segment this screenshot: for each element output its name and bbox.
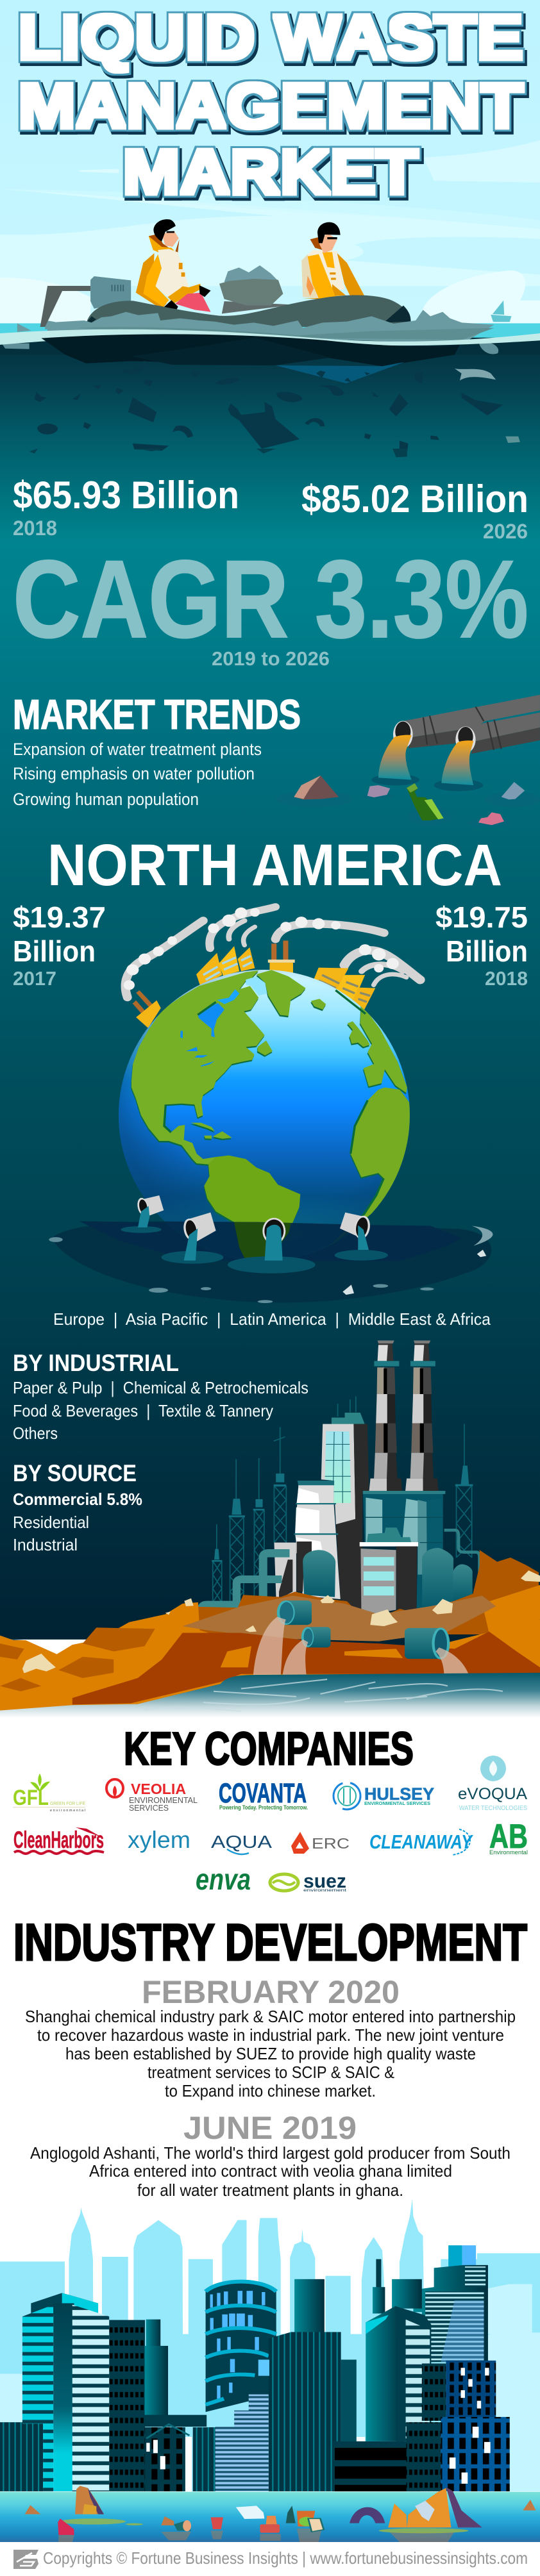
fish (455, 369, 496, 381)
water surface (0, 320, 540, 355)
market trends heading: MARKET TRENDS (13, 691, 301, 738)
sky clouds (0, 140, 540, 325)
market trends list (13, 740, 262, 809)
pale right buildings (0, 2284, 540, 2491)
underwater boat shadow (41, 334, 460, 383)
building: small window block and bridge (145, 2415, 215, 2491)
building: left dark block (0, 2422, 43, 2491)
building: chimney block (145, 2320, 168, 2416)
logo: Covanta: COVANTA (219, 1778, 307, 1809)
industrial plant (192, 1340, 539, 1634)
spray can (260, 2516, 280, 2533)
building: blue towers (407, 2361, 510, 2491)
logo: Veolia: ENVIRONMENTAL (129, 1795, 198, 1805)
outboard motor (40, 276, 131, 327)
inflatable boat hull (47, 295, 494, 344)
logo: Suez: environnement (303, 1889, 347, 1893)
logo: Hulsey: HULSEY (364, 1784, 434, 1804)
development: June 2019: JUNE 2019 (183, 2110, 357, 2146)
metal cup (502, 782, 525, 799)
white cooling tower (274, 1481, 341, 1604)
stat: 2017 value: 2017 (13, 967, 56, 990)
stat: 2018 value: $65.93 Billion (13, 474, 239, 517)
tall rock (75, 2486, 104, 2514)
building: low black block (332, 2441, 420, 2491)
puddle details (49, 1226, 493, 1303)
globe backdrop: puddle, smoke and factories (52, 907, 491, 1302)
glass tower (321, 1413, 369, 1615)
upper ground (192, 1550, 539, 1634)
stat: 2017 value: $19.37 (13, 901, 106, 934)
waste splashes (121, 1226, 388, 1274)
by source block: Industrial (13, 1535, 78, 1554)
by industrial block (13, 1350, 308, 1443)
stat: 2018 value (13, 474, 239, 540)
logo: Suez (270, 1870, 347, 1893)
dark coast edges (164, 990, 384, 1250)
footer logo (13, 2550, 38, 2569)
bottle (286, 2505, 296, 2523)
stat: 2026 value: $85.02 Billion (301, 478, 528, 520)
logo: Xylem: xylem (128, 1827, 190, 1853)
office block (360, 1542, 418, 1616)
logo: Veolia: SERVICES (129, 1803, 169, 1813)
market trends list: Expansion of water treatment plants (13, 740, 262, 759)
person: left worker (136, 219, 211, 312)
continents (131, 970, 410, 1259)
by industrial block: Paper & Pulp | Chemical & Petrochemicals (13, 1378, 308, 1397)
person: right worker (301, 222, 373, 328)
logo: GFL: environmental (50, 1809, 85, 1813)
ocean sphere (119, 970, 410, 1261)
lattice towers (213, 1396, 472, 1634)
building: twin spires (366, 2259, 431, 2441)
pipes and polluted outflow (276, 695, 540, 827)
development: February 2020: to recover hazardous waste in industrial park. The new joint venture (37, 2025, 504, 2045)
dark puddle (52, 1221, 491, 1302)
factory: top left group (196, 946, 255, 986)
earth globe (109, 970, 423, 1276)
left bucket (136, 1195, 164, 1227)
stat: 2018 regional value: Billion (446, 935, 528, 968)
logo: Evoqua: WATER TECHNOLOGIES (459, 1805, 527, 1812)
south america submerged (234, 1222, 291, 1259)
development: June 2019 (30, 2110, 510, 2200)
logo: GFL: GFL (13, 1786, 49, 1810)
teal process building (363, 1491, 445, 1609)
logo: Enva: enva (196, 1863, 251, 1896)
factory: left (133, 990, 161, 1028)
other regions: Europe | Asia Pacific | Latin America | Middle East & Africa (53, 1309, 491, 1329)
by industrial block: Others (13, 1424, 58, 1443)
logo: Covanta: Powering Today. Protecting Tomorrow. (219, 1804, 308, 1811)
stat: 2017 value (13, 901, 106, 990)
red jug (58, 2518, 74, 2535)
logo: Evoqua (458, 1756, 527, 1812)
development: February 2020: to Expand into chinese market. (165, 2081, 376, 2100)
white container (236, 2505, 264, 2519)
tyre (350, 2507, 385, 2523)
ripple (472, 1226, 493, 1246)
polluted ground and water (0, 1570, 540, 1718)
logo: Hulsey (333, 1782, 434, 1809)
floating rubbish (35, 361, 503, 451)
large rock pile (388, 2487, 482, 2527)
green bottle (407, 783, 444, 820)
logo: AB Environmental: AB (489, 1818, 528, 1856)
development: February 2020: Shanghai chemical industry park & SAIC motor entered into partnership (25, 2007, 516, 2026)
small rocks (25, 2500, 536, 2525)
stat: 2026 value: 2026 (483, 520, 528, 543)
water shadow on globe (165, 1222, 350, 1259)
development: February 2020: FEBRUARY 2020 (142, 1974, 400, 2010)
development: June 2019: Africa entered into contract with veolia ghana limited (89, 2161, 452, 2181)
boat scene (40, 219, 494, 344)
building: stepped striped block (215, 2395, 269, 2491)
orange ground (0, 1602, 540, 1713)
contaminated pool (0, 1673, 540, 1718)
navy shadow band (80, 1221, 462, 1261)
development: June 2019: Anglogold Ashanti, The world's third largest gold producer from South (30, 2143, 510, 2163)
by industrial block: BY INDUSTRIAL (13, 1350, 179, 1376)
trash bag (219, 265, 288, 313)
algae patches (60, 2518, 468, 2533)
background: sea gradient (0, 333, 540, 1718)
logo: Veolia (106, 1779, 198, 1813)
pink rock (478, 812, 504, 825)
back pipe (393, 695, 540, 748)
development: June 2019: for all water treatment plants in ghana. (137, 2181, 403, 2200)
green can (174, 2520, 191, 2531)
stat: 2026 value (301, 478, 528, 543)
by source block: Residential (13, 1513, 89, 1532)
stat: 2018 regional value (435, 901, 528, 990)
river water (0, 2492, 540, 2542)
logo: ERC (291, 1832, 350, 1854)
polluted river (0, 2486, 540, 2542)
logo: ERC: ERC (312, 1835, 350, 1852)
cylindrical tower (206, 2282, 276, 2412)
development: February 2020: has been established by SUEZ to provide high quality waste (65, 2044, 476, 2063)
by industrial block: Food & Beverages | Textile & Tannery (13, 1401, 273, 1420)
by source block: Commercial 5.8% (13, 1490, 142, 1509)
purple rock (367, 785, 390, 797)
by source block: BY SOURCE (13, 1460, 137, 1486)
distant boat (491, 301, 511, 322)
centre bucket (262, 1218, 285, 1261)
stat: 2018 value: 2018 (13, 517, 57, 540)
logo: Clean Harbors (13, 1827, 104, 1854)
background: sky (0, 0, 540, 340)
river reflections (58, 2529, 455, 2542)
logo: Evoqua: eVOQUA (458, 1785, 527, 1803)
logo: AB Environmental: Environmental (489, 1849, 528, 1856)
front pipe (455, 713, 540, 754)
development: February 2020 (25, 1974, 516, 2100)
building: black window block (109, 2320, 145, 2491)
regional heading: NORTH AMERICA (47, 833, 502, 898)
stat: CAGR: 2019 to 2026 (212, 647, 330, 670)
market trends list: Rising emphasis on water pollution (13, 764, 255, 783)
logo: GFL: GREEN FOR LIFE (50, 1802, 85, 1806)
discharge pipes (277, 1600, 450, 1659)
logo: Suez: suez (303, 1870, 346, 1892)
building: large teal tower (22, 2293, 109, 2491)
food box (297, 2511, 324, 2532)
key companies heading: KEY COMPANIES (124, 1724, 414, 1775)
pool pollution marks (145, 1679, 503, 1711)
stat: 2018 regional value: 2018 (485, 967, 528, 990)
puddle foam dabs (49, 1237, 434, 1303)
logo: Veolia: VEOLIA (131, 1781, 186, 1797)
storage domes (303, 1548, 473, 1609)
second bucket (181, 1213, 216, 1261)
logo: Cleanaway: CLEANAWAY (369, 1831, 474, 1853)
dead fish (342, 1250, 486, 1295)
polluted flows (378, 735, 473, 785)
pale skyline silhouette (0, 2199, 540, 2491)
hudson bay and lakes (180, 976, 267, 1067)
ground gap (8, 1640, 98, 1654)
title (18, 2, 523, 207)
logo: Covanta (219, 1778, 308, 1811)
title: MARKET (122, 137, 418, 207)
foam band over debris (0, 301, 540, 451)
twin chimneys (369, 1340, 439, 1492)
logo: GFL (13, 1774, 85, 1813)
development: February 2020: treatment services to SCIP & SAIC & (148, 2063, 394, 2082)
logo: Aqua: AQUA (211, 1832, 272, 1852)
puddle rings (276, 791, 540, 827)
pale effluent (253, 1617, 472, 1684)
rear striped tower (413, 2245, 488, 2362)
title: LIQUID WASTE (18, 2, 523, 72)
stat: 2018 regional value: $19.75 (435, 901, 528, 934)
logo: Clean Harbors: CleanHarbors (13, 1827, 104, 1853)
right bucket (340, 1213, 372, 1250)
rocks (22, 1570, 540, 1674)
smoke plumes (124, 907, 420, 997)
title: MANAGEMENT (18, 71, 523, 141)
stat: 2017 value: Billion (13, 935, 96, 968)
more rubbish (30, 449, 407, 457)
factory: right group (313, 968, 375, 1010)
by source block (13, 1460, 142, 1554)
city skyline (0, 2199, 540, 2491)
process pipes (201, 1530, 480, 1628)
building: central dark tower (258, 2279, 357, 2491)
factory: top centre (268, 940, 295, 973)
splash pools (371, 774, 483, 791)
red cup (211, 2517, 223, 2529)
ground shading (0, 1585, 540, 1704)
rock (294, 776, 339, 799)
market trends list: Growing human population (13, 790, 199, 809)
logo: Hulsey: ENVIRONMENTAL SERVICES (364, 1800, 430, 1806)
